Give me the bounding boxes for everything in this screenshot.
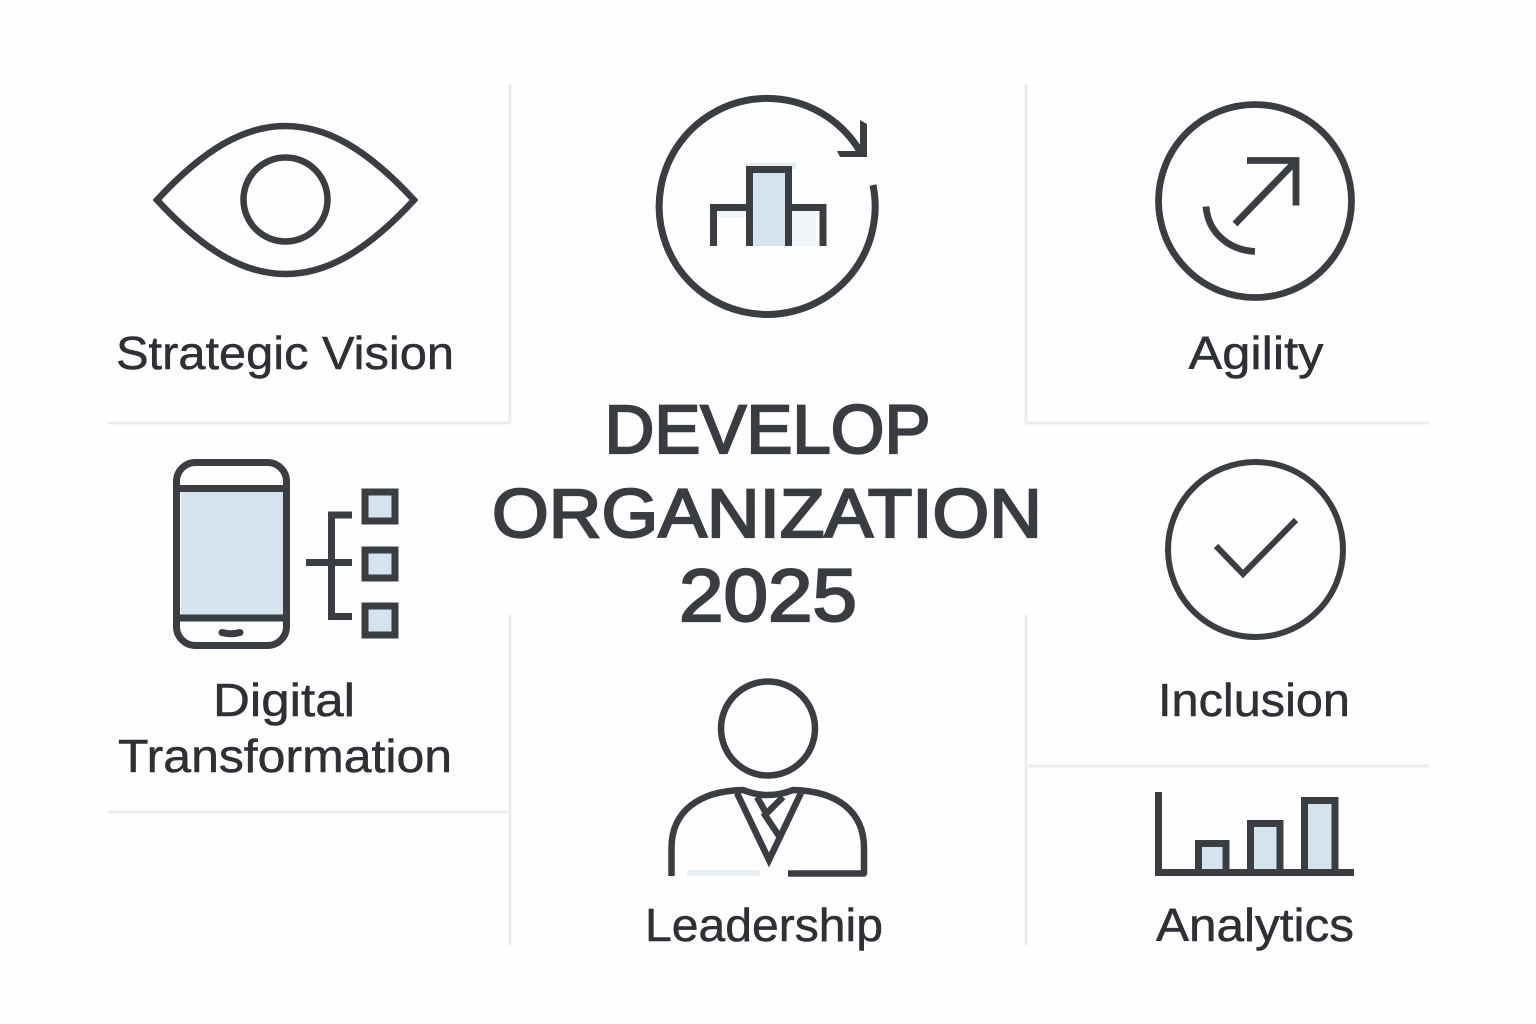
- title: [492, 391, 1042, 637]
- label: Leadership: Leadership: [645, 899, 883, 951]
- label: Analytics: Analytics: [1156, 899, 1354, 951]
- title: DEVELOP: [604, 391, 930, 468]
- label: Digital Transformation: Digital: [213, 674, 355, 726]
- title: 2025: [679, 554, 857, 637]
- icon: leader: [672, 682, 864, 876]
- icon: digital device and hierarchy: [176, 462, 395, 646]
- label: Agility: Agility: [1188, 327, 1324, 379]
- label: Digital Transformation: [118, 674, 452, 782]
- label: Inclusion: Inclusion: [1158, 674, 1350, 726]
- title: ORGANIZATION: [492, 475, 1042, 552]
- icon: agility arrow: [1158, 104, 1352, 298]
- icon: inclusion check: [1168, 462, 1343, 637]
- icon: eye: [157, 126, 414, 274]
- icon: analytics bars: [1158, 792, 1354, 872]
- label: Strategic Vision: Strategic Vision: [116, 327, 454, 379]
- label: Digital Transformation: Transformation: [118, 730, 452, 782]
- icon: org chart cycle: [659, 98, 875, 314]
